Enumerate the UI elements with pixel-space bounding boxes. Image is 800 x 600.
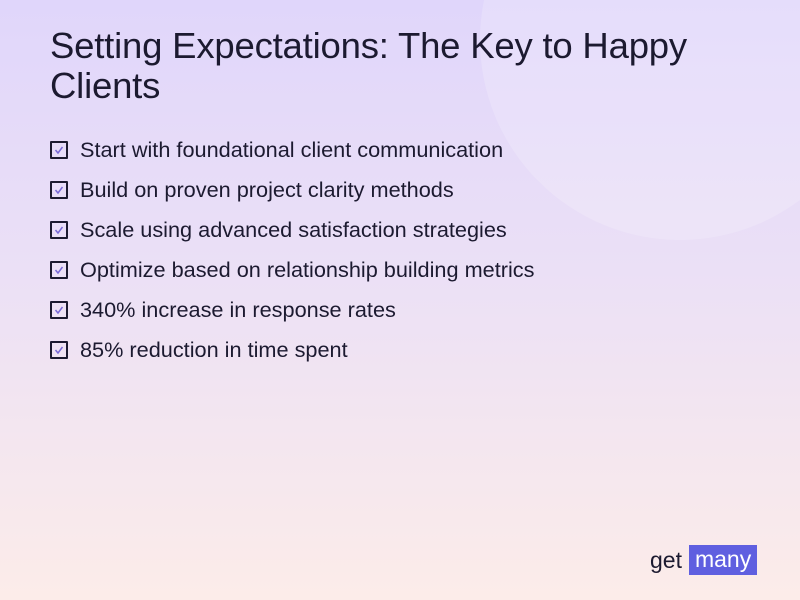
title: Setting Expectations: The Key to Happy Clients <box>50 25 687 106</box>
item 3: Scale using advanced satisfaction strategies <box>80 217 507 242</box>
item 1: Start with foundational client communication <box>80 137 503 162</box>
item 4: Optimize based on relationship building metrics <box>80 257 534 282</box>
item 6: 85% reduction in time spent <box>80 337 348 362</box>
checklist <box>50 137 534 362</box>
item 5: 340% increase in response rates <box>80 297 396 322</box>
item 2: Build on proven project clarity methods <box>80 177 454 202</box>
logo: many <box>695 546 751 572</box>
logo: get <box>650 546 682 572</box>
logo <box>650 545 757 575</box>
